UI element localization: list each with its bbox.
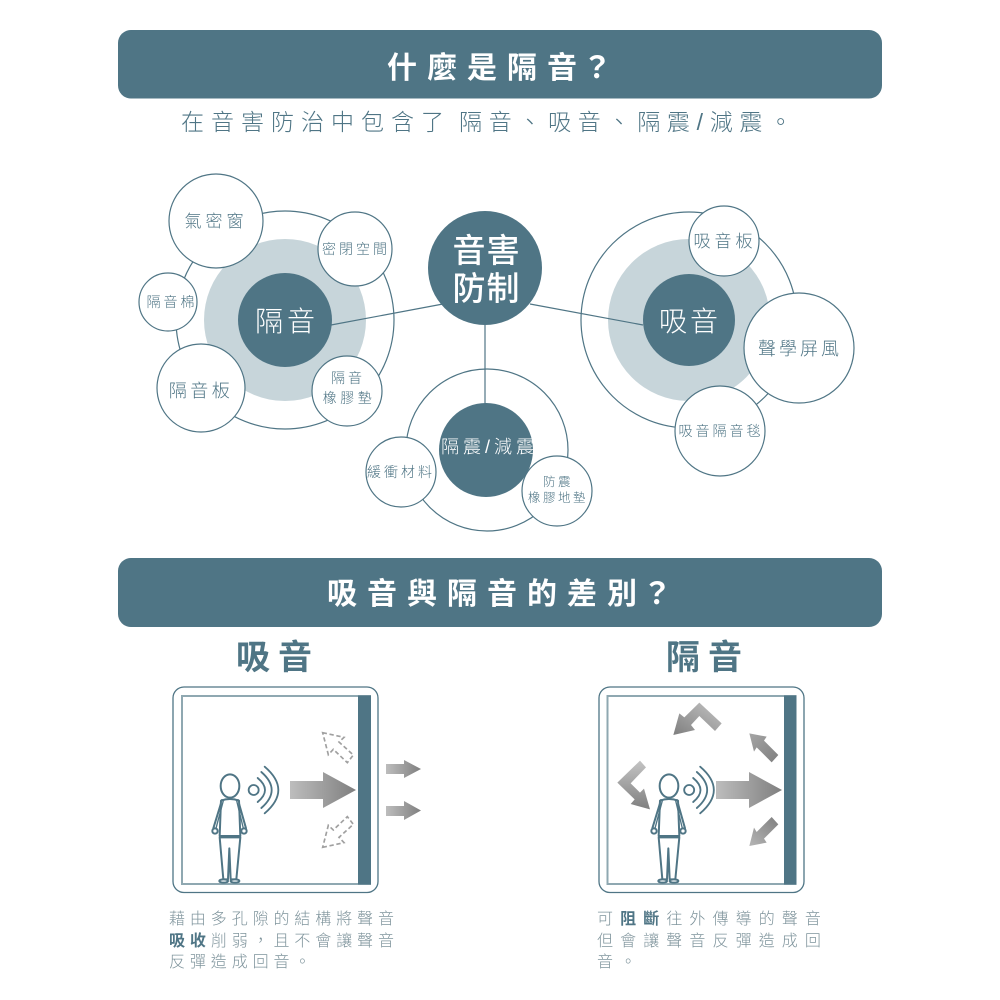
diagram: sound insulation room (599, 687, 804, 892)
core: 隔震/減震 (439, 403, 534, 497)
icon: sound waves (684, 767, 714, 813)
bubble: 緩衝材料 (366, 437, 436, 507)
bubble: 緩衝材料: 緩衝材料 (367, 464, 435, 480)
bubble: 吸音板: 吸音板 (694, 232, 756, 251)
text block: 隔音 description: 可阻斷往外傳導的聲音 (597, 910, 828, 928)
intro text: 在音害防治中包含了 (181, 109, 451, 135)
bubble: 隔音棉 (139, 273, 198, 331)
intro text: 隔音、吸音、隔震/減震。 (459, 109, 799, 135)
heading bar: 什麼是隔音: 什麼是隔音？ (387, 52, 622, 85)
bubble: 隔音棉: 隔音棉 (146, 294, 198, 310)
bubble: 吸音隔音毯 (675, 386, 765, 476)
text block: 吸音 description: 反彈造成回音。 (169, 953, 315, 971)
arrow: transmitted sound lower (386, 801, 421, 820)
center node: 音害防制: 防制 (452, 270, 520, 307)
arrow: incident sound (290, 772, 356, 808)
arrow: small reflection lower right (749, 817, 778, 846)
core: 隔音: 隔音 (255, 306, 319, 337)
core: 隔音 (238, 273, 332, 367)
arrow: bent reflection top (673, 703, 722, 735)
heading bar: 什麼是隔音 (118, 30, 882, 98)
subheading: 吸音: 吸音 (236, 639, 320, 677)
person icon (212, 774, 247, 883)
text block: 隔音 description: 但會讓聲音反彈造成回 (597, 932, 828, 950)
heading bar: 吸音與隔音的差別: 吸音與隔音的差別？ (327, 578, 682, 611)
bubble: 隔音橡膠墊: 隔音 (331, 370, 365, 386)
bubble: 防震橡膠地墊: 防震 (543, 475, 573, 489)
diagram: sound absorption room (173, 687, 421, 892)
bubble: 吸音板 (689, 206, 759, 276)
icon: sound waves (249, 767, 278, 813)
core: 隔震/減震: 隔震/減震 (441, 437, 534, 457)
bubble: 密閉空間 (318, 212, 392, 286)
arrow: transmitted sound upper (386, 760, 421, 778)
bubble: 隔音橡膠墊: 橡膠墊 (323, 390, 375, 406)
person icon (651, 774, 686, 883)
arrow: bent reflection left (617, 761, 650, 809)
bubble: 吸音隔音毯: 吸音隔音毯 (678, 423, 764, 439)
cluster: 隔音 (139, 174, 394, 432)
bubble: 氣密窗 (169, 174, 263, 268)
subheading: 隔音: 隔音 (666, 639, 750, 677)
bubble: 隔音橡膠墊 (312, 356, 382, 426)
bubble: 氣密窗: 氣密窗 (184, 212, 248, 231)
core: 吸音 (643, 274, 735, 366)
text block: 隔音 description: 音。 (597, 953, 643, 971)
bubble: 聲學屏風 (744, 293, 854, 403)
bubble: 防震橡膠地墊 (522, 456, 592, 526)
arrow: small reflection upper right (749, 733, 778, 762)
heading bar: 吸音與隔音的差別 (118, 558, 882, 627)
bubble: 隔音板 (157, 344, 245, 432)
text block: 隔音 description (597, 910, 828, 971)
bubble: 聲學屏風: 聲學屏風 (758, 339, 842, 359)
center node: 音害防制: 音害 (452, 232, 520, 269)
center node: 音害防制 (428, 211, 542, 325)
arrow: weakened reflection lower (dashed) (323, 817, 353, 847)
bubble: 防震橡膠地墊: 橡膠地墊 (528, 491, 588, 505)
bubble: 隔音板: 隔音板 (169, 381, 233, 401)
connector lines (331, 304, 643, 404)
bubble: 密閉空間: 密閉空間 (322, 241, 390, 257)
text block: 吸音 description: 吸收削弱，且不會讓聲音 (169, 932, 399, 950)
cluster: 隔震/減震 (366, 369, 592, 531)
text block: 吸音 description: 藉由多孔隙的結構將聲音 (169, 910, 399, 928)
arrow: incident sound (716, 772, 782, 808)
core: 吸音: 吸音 (659, 306, 721, 337)
cluster: 吸音 (581, 206, 854, 476)
arrow: weakened reflection upper (dashed) (323, 733, 353, 763)
text block: 吸音 description (169, 910, 399, 971)
